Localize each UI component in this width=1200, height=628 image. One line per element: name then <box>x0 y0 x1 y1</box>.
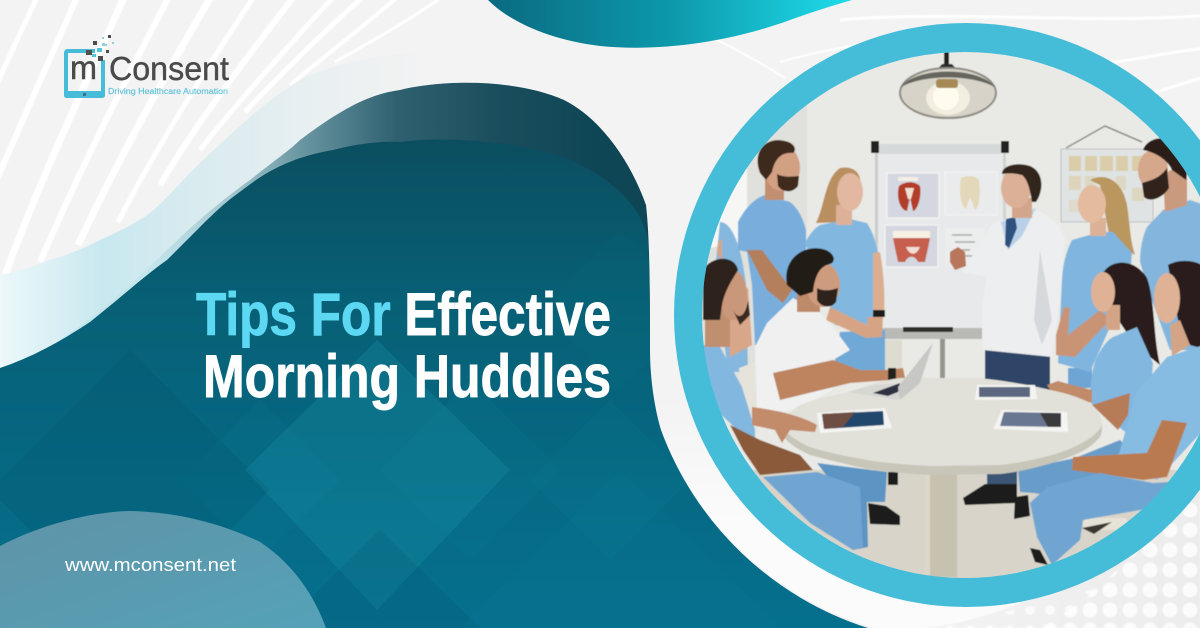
person: seated man, white polo <box>755 248 905 412</box>
person: man in scrubs, standing left <box>738 140 806 345</box>
table <box>782 378 1102 577</box>
heading <box>196 281 611 410</box>
heading line 2: Morning Huddles <box>203 343 611 410</box>
white band behind ring <box>640 0 1200 628</box>
flip chart <box>870 140 1010 268</box>
website url: www.mconsent.net <box>64 555 236 575</box>
bottom left translucent circle <box>0 511 326 628</box>
person: blond woman in scrubs <box>805 167 885 378</box>
tagline: Driving Healthcare Automation <box>108 87 228 96</box>
chart: red tooth <box>887 173 939 218</box>
laptop <box>847 343 933 400</box>
diamond pattern overlay <box>0 230 780 628</box>
person: seated man, foreground left <box>703 259 813 475</box>
person: doctor in white coat <box>950 164 1065 390</box>
ring around photo <box>674 23 1200 607</box>
person: seated woman, middle right <box>1047 263 1160 440</box>
chart: sketch <box>952 234 976 258</box>
wordmark: Consent: Consent <box>109 50 229 87</box>
background stripes <box>0 0 1200 275</box>
tooth wall chart <box>1061 126 1153 222</box>
chart: beige tooth <box>945 172 997 215</box>
dark gradient band <box>60 83 650 400</box>
pale swoosh <box>0 52 430 368</box>
standing legs behind table <box>868 470 1030 525</box>
hand on table <box>752 407 817 443</box>
person: partly hidden woman, far left <box>712 222 752 372</box>
tablets <box>817 385 1068 433</box>
top teal curve shape <box>488 0 852 48</box>
icon: tablet outline <box>64 51 105 98</box>
photo: team meeting in dental clinic <box>695 45 1200 585</box>
person: bearded man, far right <box>1138 138 1200 350</box>
floor <box>752 470 1178 578</box>
heading line 1: Tips For Effective <box>196 281 611 348</box>
logo: mConsent <box>64 35 229 98</box>
chart: teeth row <box>885 225 938 267</box>
chair back <box>738 364 756 430</box>
dot pattern: lower right <box>868 450 1200 628</box>
ceiling lamp <box>900 52 996 118</box>
wall <box>722 52 1200 471</box>
person: seated man legs <box>763 463 887 550</box>
person: seated woman, foreground right <box>1018 261 1200 565</box>
icon: pixel squares <box>86 35 114 61</box>
small table behind <box>882 327 982 379</box>
person: blond woman, right <box>1056 177 1135 388</box>
wordmark: m: m <box>70 49 97 86</box>
main teal shape <box>0 139 868 628</box>
